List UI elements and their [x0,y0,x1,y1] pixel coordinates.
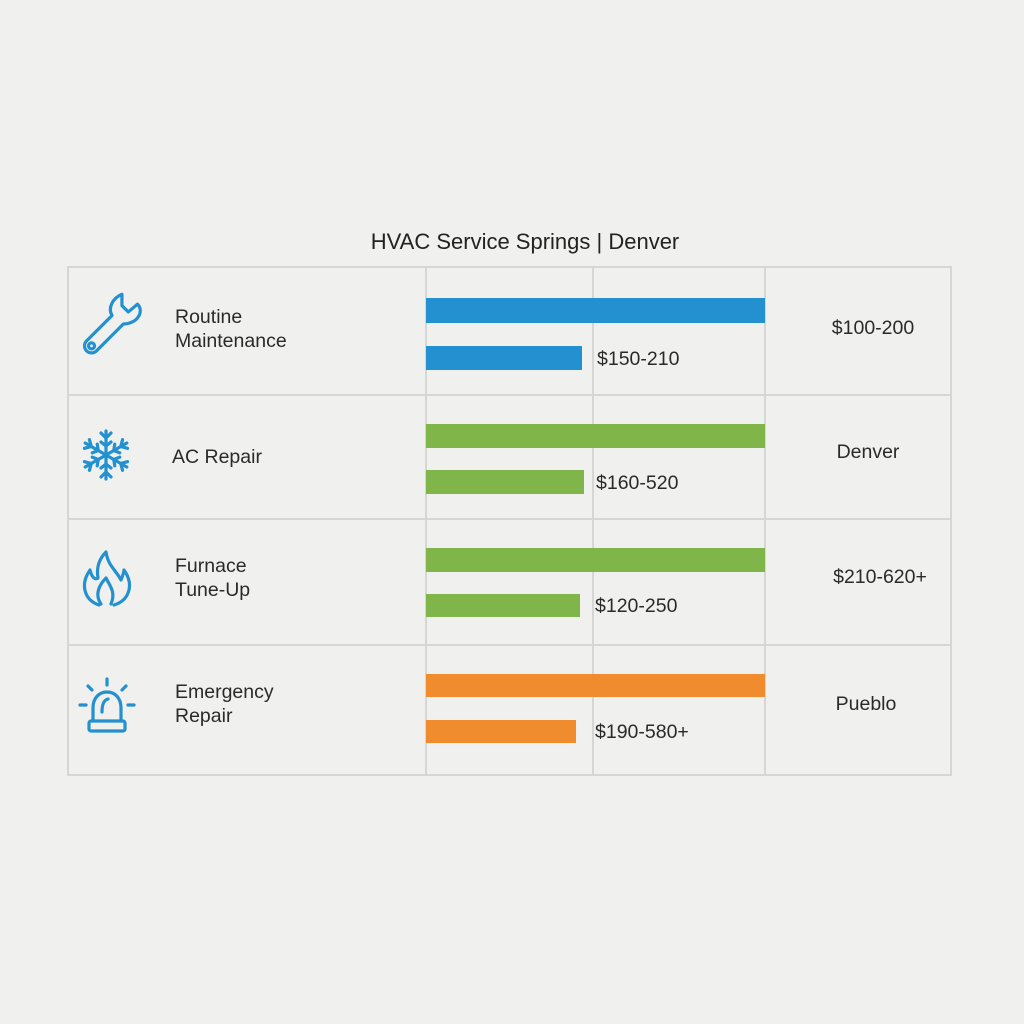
title: HVAC Service Springs | Denver [371,229,679,254]
row: furnace tune-up: Furnace [175,555,247,577]
table grid [68,267,951,775]
row: AC repair [83,424,900,494]
row: AC repair: $160-520 [596,472,679,494]
row: emergency repair: Pueblo [836,693,897,715]
row: furnace tune-up: $210-620+ [833,566,927,588]
row: furnace tune-up: Tune-Up [175,579,250,601]
row: emergency repair: $190-580+ [595,721,689,743]
row: AC repair: AC Repair [172,446,262,468]
icon: flame [84,552,129,605]
row: routine maintenance [75,290,914,370]
row: routine maintenance: $150-210 [597,348,680,370]
row: routine maintenance: Routine [175,306,242,328]
row: emergency repair: Emergency [175,681,274,703]
row: routine maintenance: Maintenance [175,330,287,352]
row: routine maintenance: $100-200 [832,317,914,339]
row: AC repair: Denver [837,441,900,463]
row: furnace tune-up: $120-250 [595,595,678,617]
icon: wrench [75,290,144,360]
icon: snowflake [83,431,129,479]
icon: siren [80,679,134,731]
bars [426,298,765,323]
row: furnace tune-up [84,548,927,617]
row: emergency repair [80,674,897,743]
row: emergency repair: Repair [175,705,233,727]
